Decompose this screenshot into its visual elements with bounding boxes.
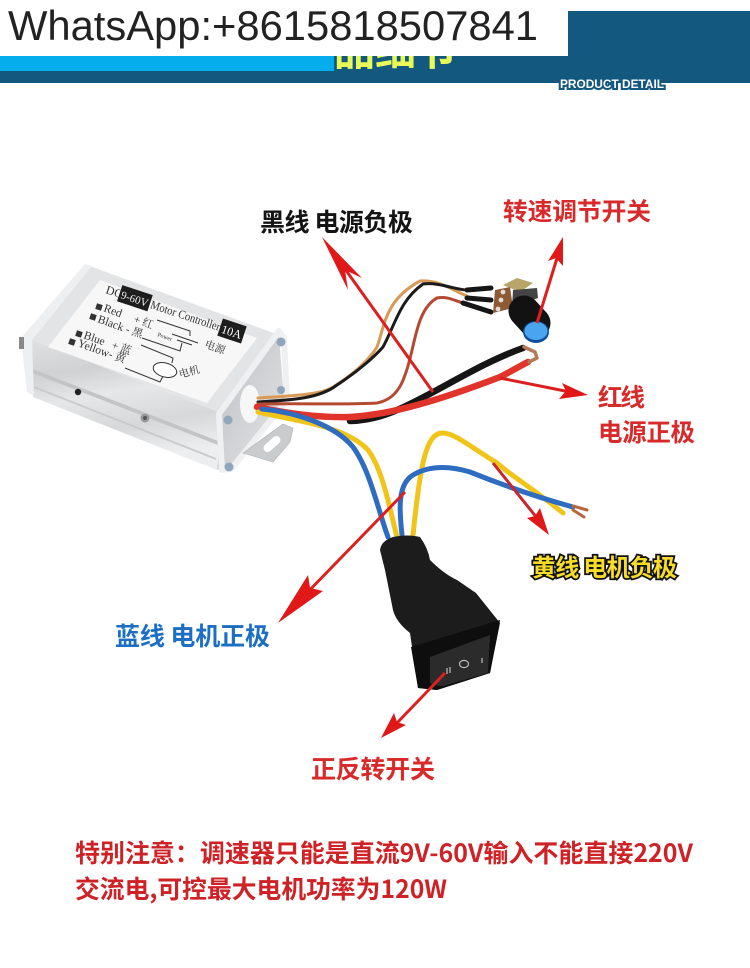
wiring legend: Black [96,314,126,334]
wiring legend: Yellow [76,338,111,360]
rocker switch [380,536,500,690]
potentiometer [493,278,549,343]
warning note: 特别注意：调速器只能是直流9V-60V输入不能直接220V [75,834,694,870]
label: black wire: 黑线 电源负极 [260,203,413,239]
wiring legend: Red [102,303,124,320]
motor wires [258,409,587,537]
mounting bracket [243,424,293,462]
wiring legend: 电源 [203,338,228,357]
label title: DC [104,283,124,301]
warning note [75,834,694,906]
label title: 9-60V [119,290,150,310]
label sticker [48,280,257,403]
wiring legend: + 红 [132,313,155,332]
wiring legend: 电机 [177,363,202,381]
header title clipped: 品细节 [334,17,457,77]
controller box [19,264,293,472]
potentiometer wires [258,281,491,404]
label: yellow wire: 黄线 电机负极 [532,548,677,583]
header band [0,11,750,83]
wiring legend: + 蓝 [110,338,134,358]
arrow: red wire [500,378,588,399]
wiring legend: Blue [82,330,107,348]
wiring legend: - 黑 [124,323,146,341]
warning note: 交流电,可控最大电机功率为120W [75,870,447,906]
switch housing [380,536,500,690]
screws [276,338,286,346]
box body [25,337,222,470]
label: blue wire: 蓝线 电机正极 [115,617,270,653]
wiring legend [68,303,228,382]
label: red wire [598,379,695,449]
arrow: yellow wire [493,463,549,535]
product detail tag: PRODUCT DETAIL [560,79,664,91]
label title: Motor Controller [149,297,222,334]
arrow: black wire [322,237,433,392]
power wires [257,347,537,421]
arrow: rocker switch [381,673,445,738]
label: direction switch: 正反转开关 [311,750,435,786]
wiring legend: Power [156,332,173,343]
rocker face [430,635,490,686]
label: red wire: 红线 [598,379,645,414]
arrow: speed knob [537,237,563,323]
knob [524,311,535,323]
label: speed switch: 转速调节开关 [503,192,651,228]
label title: 10A [220,322,244,342]
label title [103,281,247,344]
whatsapp banner: WhatsApp:+8615818507841 [8,2,538,49]
label: red wire: 电源正极 [598,414,695,449]
wire grommet [240,385,260,423]
wiring legend: - 黄 [107,347,129,366]
rocker marks [447,658,482,674]
arrow: blue wire [278,492,405,623]
